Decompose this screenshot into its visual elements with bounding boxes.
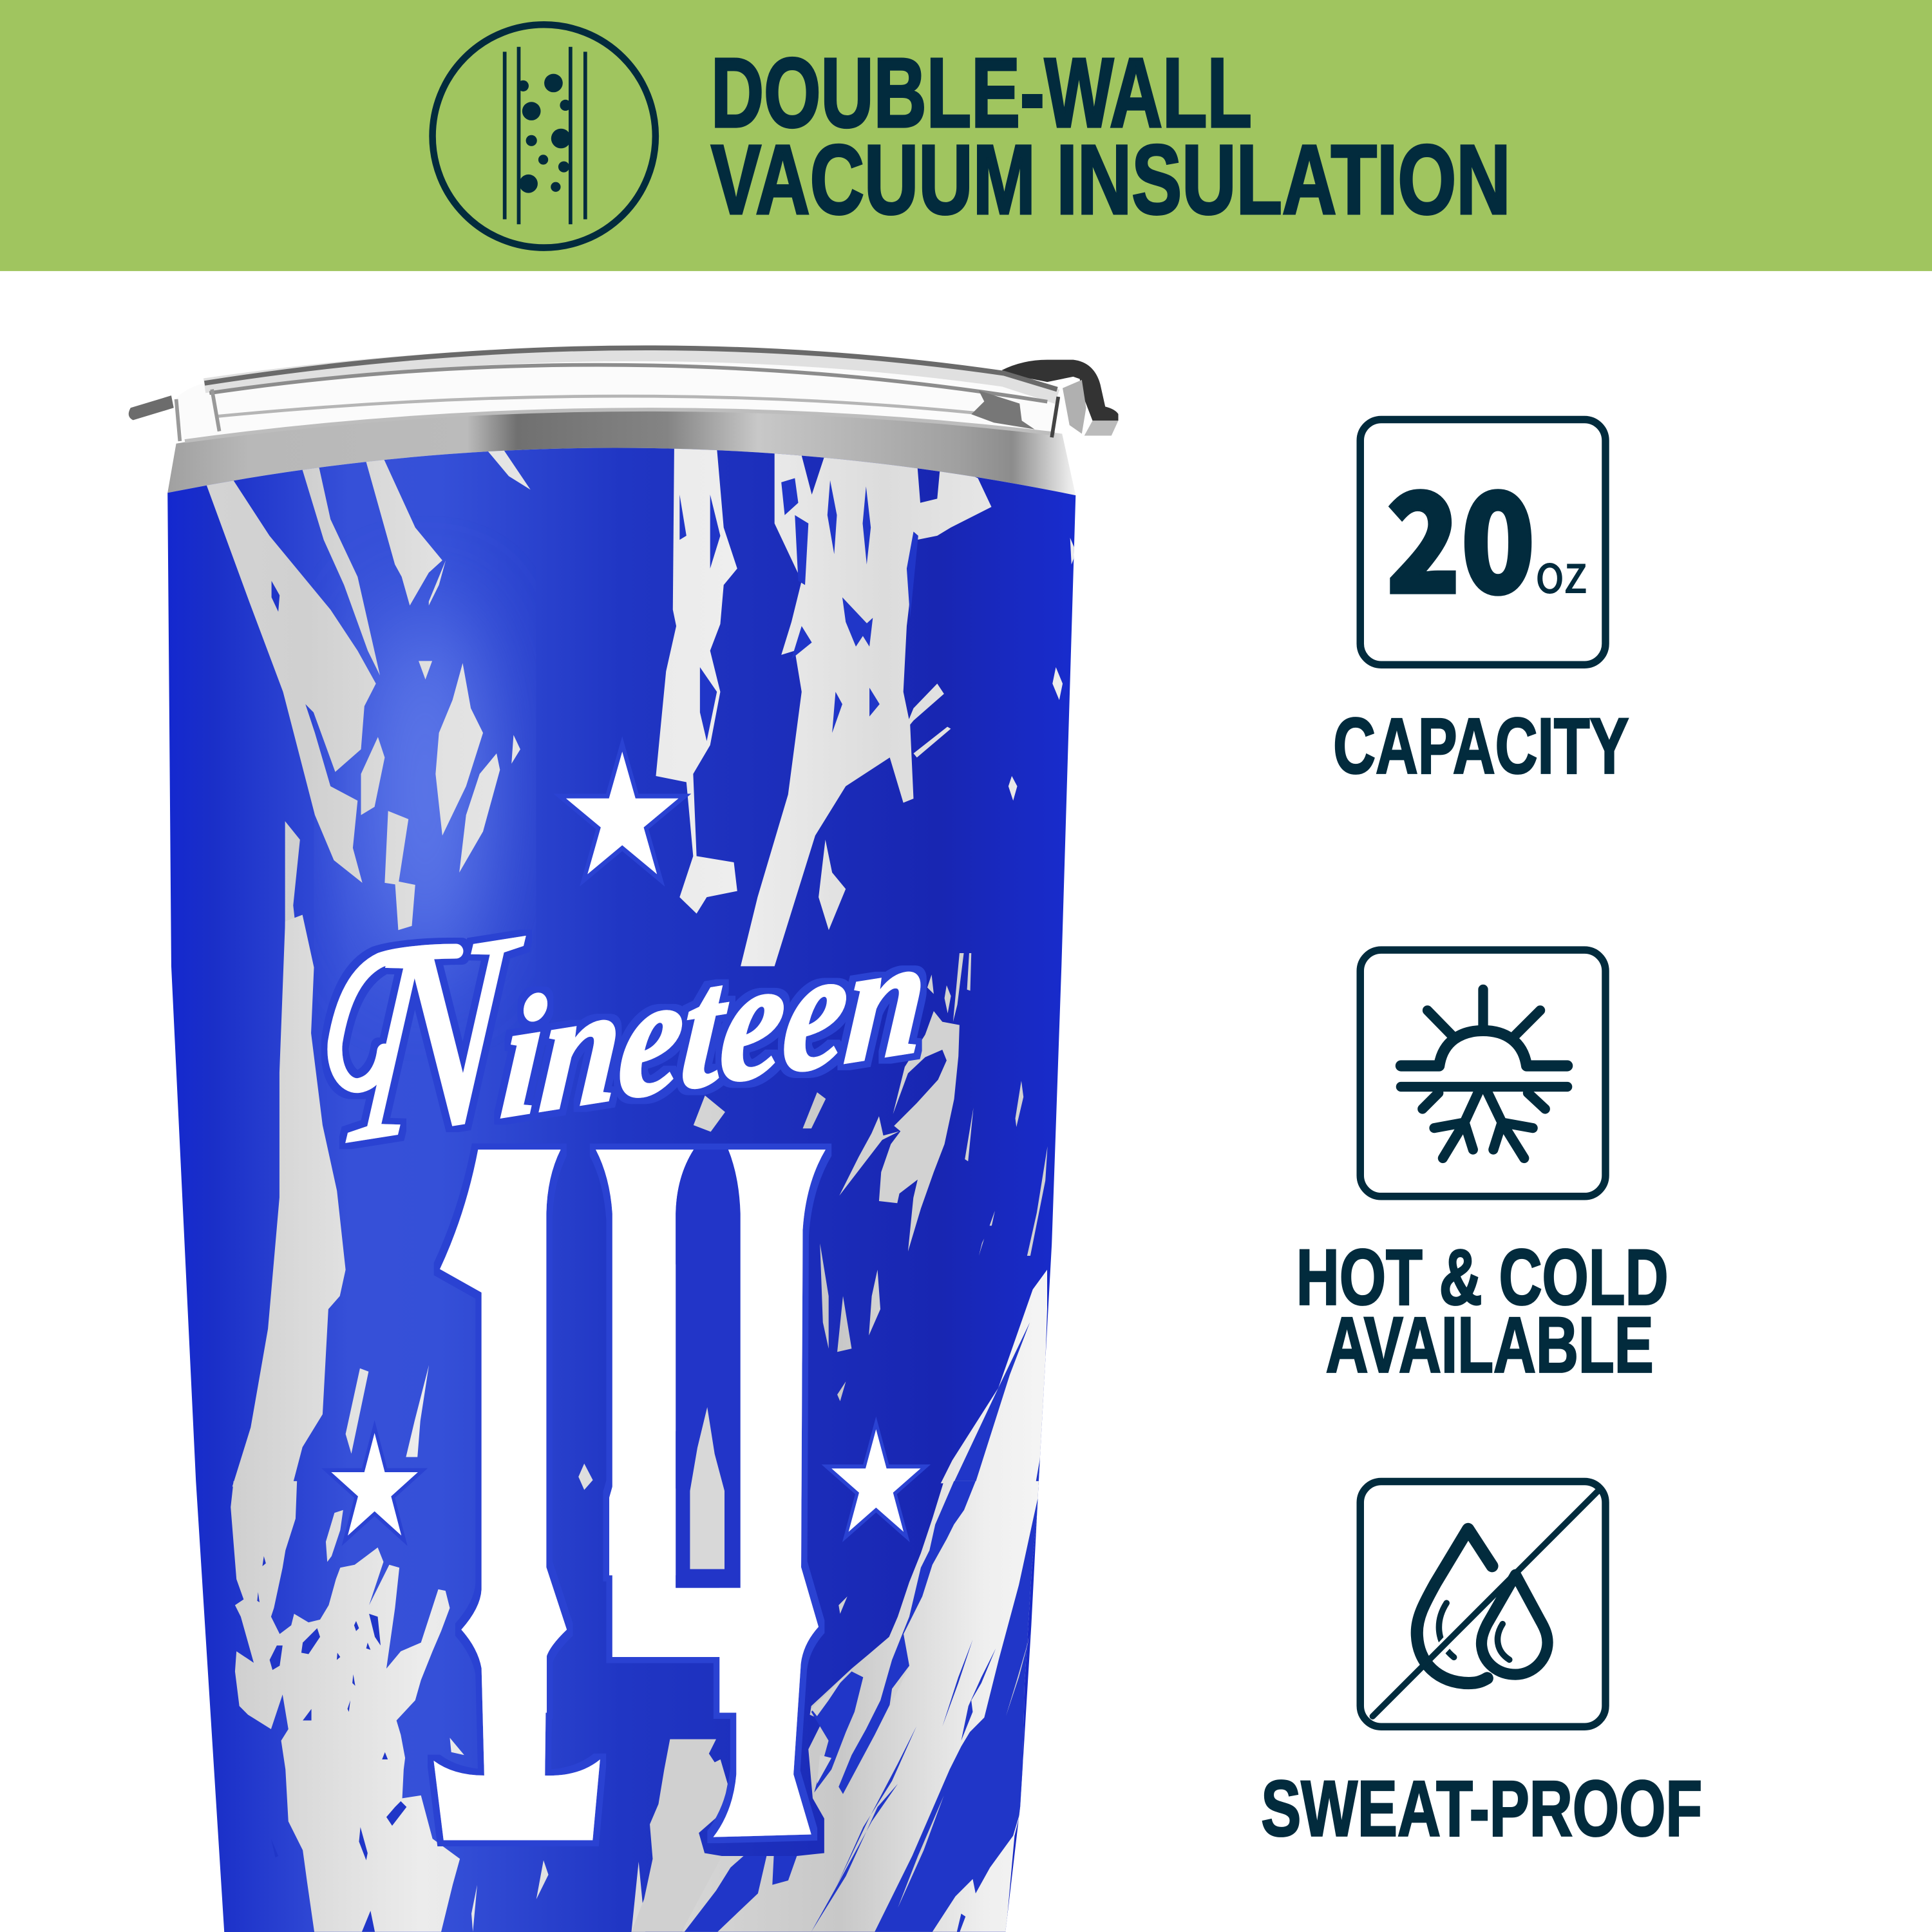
label: hot and cold available: HOT & COLD: [1296, 1233, 1669, 1321]
icon: sun and snowflake: [1360, 950, 1605, 1197]
icon: water drops crossed out: [1360, 1482, 1605, 1727]
upper stripes: [204, 449, 1076, 966]
header band: [0, 0, 1932, 271]
big number: [433, 822, 826, 1932]
icon: 20 oz: oz: [1535, 531, 1587, 608]
tumbler body: [167, 448, 1075, 1932]
lid handle right: [1001, 360, 1118, 421]
lid tab left: [129, 395, 174, 420]
lower right brush sweep: [631, 1481, 1039, 1932]
script word: Nineteen: [340, 809, 942, 1201]
big number: 4: [602, 822, 808, 1932]
holes: [272, 478, 918, 741]
middle stripes: [232, 915, 1047, 1490]
panel: sweat-proof: [1261, 1482, 1702, 1853]
tumbler product photo: [129, 348, 1118, 1932]
big number: 1: [472, 822, 556, 1932]
clear lid: [174, 348, 1118, 441]
label: capacity: CAPACITY: [1333, 702, 1629, 790]
title: DOUBLE-WALL: [711, 38, 1252, 148]
label: sweat-proof: SWEAT-PROOF: [1261, 1765, 1702, 1853]
panel: hot and cold: [1296, 950, 1669, 1389]
icon: 20 oz: 20: [1386, 432, 1535, 632]
label: hot and cold available: AVAILABLE: [1326, 1301, 1654, 1389]
label: hot and cold available: [1296, 1233, 1669, 1389]
lower left blob: [231, 1481, 645, 1932]
title: [711, 38, 1511, 235]
steel rim: [167, 404, 1075, 495]
icon: double wall with vacuum bubbles: [433, 24, 656, 248]
icon: 20 oz: [1360, 419, 1605, 665]
star right: [831, 1429, 920, 1532]
star top: [566, 752, 679, 874]
star left: [331, 1433, 418, 1535]
right swirl: [839, 953, 1048, 1256]
panel: capacity: [1333, 419, 1629, 790]
title: VACUUM INSULATION: [711, 125, 1511, 235]
distressed paint pattern: [204, 449, 1076, 1932]
